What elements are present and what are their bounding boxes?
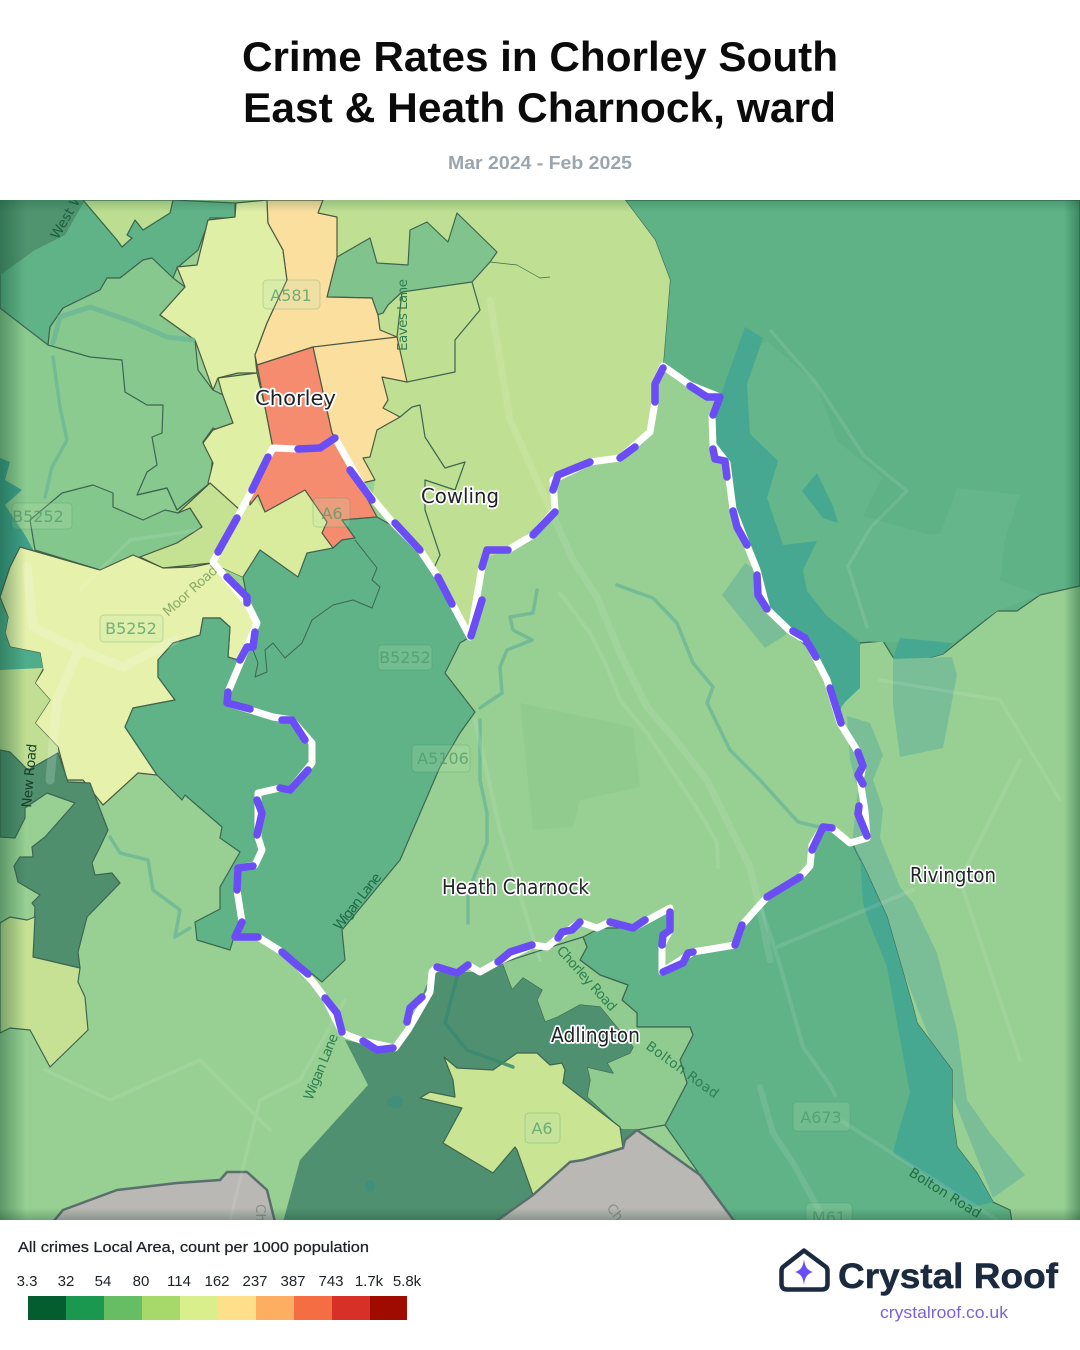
roads: faint network <box>27 300 1060 1222</box>
region: Chorley town wards <box>140 200 407 577</box>
region: south dark green and yellow <box>283 963 637 1222</box>
road name labels: Ch <box>603 1201 627 1225</box>
ward boundary: white line <box>213 366 867 1048</box>
road name labels: Moor Road <box>160 563 221 620</box>
region: north centre Cowling <box>318 200 670 637</box>
road name labels: Eaves Lane <box>395 279 411 351</box>
legend value labels: 80 <box>133 1273 149 1290</box>
road name labels: Wigan Lane <box>301 1032 342 1102</box>
title <box>242 33 838 131</box>
legend value labels: 5.8k <box>393 1273 422 1290</box>
legend value labels: 32 <box>58 1273 74 1290</box>
legend value labels: 743 <box>318 1273 344 1290</box>
legend value labels: 162 <box>204 1273 230 1290</box>
region: west pale yellow <box>0 547 257 805</box>
road name labels: New Road <box>19 743 41 808</box>
road shield labels: B5252 <box>105 619 157 638</box>
legend value labels: 3.3 <box>17 1273 37 1290</box>
road shield labels: B5252 <box>379 648 431 667</box>
title: East & Heath Charnock, ward <box>243 84 836 131</box>
road shields <box>12 280 852 1233</box>
region: north-west and west greens <box>0 200 250 600</box>
region: grey areas outside data <box>53 1130 735 1222</box>
map edge shading <box>0 200 1080 1220</box>
road name labels: Bolton Road <box>906 1165 984 1222</box>
brand url: crystalroof.co.uk <box>880 1303 1009 1322</box>
subtitle: date range: Mar 2024 - Feb 2025 <box>448 153 632 173</box>
legend value labels: 54 <box>95 1273 111 1290</box>
road shield labels: M61 <box>812 1208 846 1227</box>
legend title: All crimes Local Area, count per 1000 population <box>18 1239 369 1256</box>
road shield labels: B5252 <box>12 507 64 526</box>
place labels: Cowling <box>421 484 499 508</box>
title: Crime Rates in Chorley South <box>242 33 838 80</box>
road shield labels: A673 <box>800 1108 842 1127</box>
road name labels: Ch <box>252 1204 268 1222</box>
road shield labels: A5106 <box>417 749 469 768</box>
legend value labels: 237 <box>242 1273 268 1290</box>
legend value labels: 1.7k <box>355 1273 384 1290</box>
region: east moors and reservoirs <box>625 200 1080 1198</box>
legend colour scale <box>28 1296 407 1320</box>
region: south-east mid green <box>502 827 1012 1222</box>
inner ward boundary lines <box>253 540 380 677</box>
legend <box>17 1239 422 1320</box>
road shield labels: A581 <box>270 286 312 305</box>
legend value labels: 387 <box>280 1273 306 1290</box>
road shield labels: A6 <box>321 504 343 523</box>
road name labels: Chorley Road <box>553 943 620 1015</box>
water: streams and ponds <box>45 307 823 1192</box>
place labels: Chorley <box>255 386 336 410</box>
place labels: Rivington <box>910 863 996 887</box>
place labels: Heath Charnock <box>442 875 589 899</box>
choropleth map <box>0 190 1080 1233</box>
road name labels: Wigan Lane <box>331 870 385 933</box>
road shield labels <box>12 286 846 1227</box>
logo: Crystal Roof <box>782 1250 1058 1322</box>
brand name: Crystal Roof <box>838 1257 1058 1296</box>
road name labels: Bolton Road <box>643 1038 722 1102</box>
icon: house with star <box>782 1250 828 1290</box>
legend value labels <box>17 1273 422 1290</box>
place labels: Adlington <box>551 1023 640 1047</box>
road name labels: West W <box>48 190 87 242</box>
region: left edge patches <box>0 600 120 1067</box>
place labels <box>255 386 996 1047</box>
legend value labels: 114 <box>167 1273 191 1290</box>
road shield labels: A6 <box>531 1119 553 1138</box>
road name labels <box>19 190 984 1225</box>
region: west mid green <box>125 517 475 982</box>
ward boundary: purple dashes <box>218 368 867 1050</box>
